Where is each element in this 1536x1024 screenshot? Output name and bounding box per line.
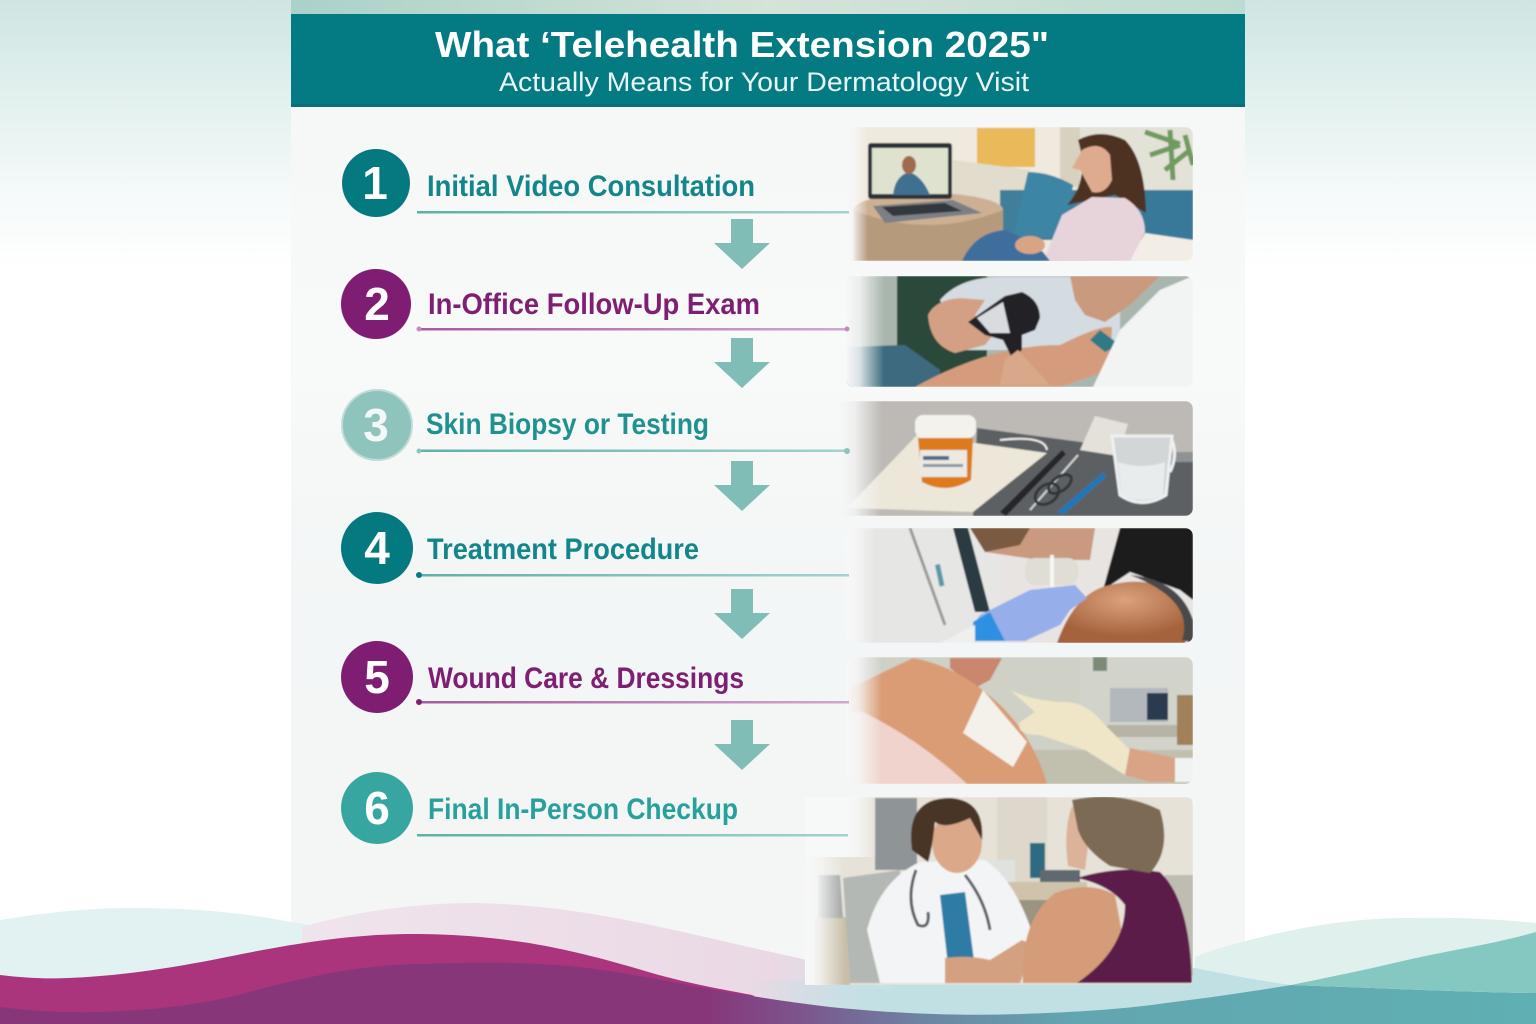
photo 2: dermatoscope exam	[846, 276, 1193, 387]
step 2	[341, 269, 850, 339]
step 3	[342, 390, 850, 460]
subtitle line: Actually Means for Your Dermatology Visit	[499, 67, 1030, 97]
rule 2	[416, 326, 850, 332]
label 5: Wound Care & Dressings	[428, 662, 744, 695]
number badge 1: 1	[362, 157, 388, 209]
step 5	[341, 641, 849, 713]
step 4	[341, 512, 849, 584]
number badge 2: 2	[364, 278, 390, 330]
number badge 2	[341, 269, 411, 339]
number badge 5	[341, 641, 413, 713]
rule 1	[417, 211, 849, 214]
bottom waves	[0, 903, 1536, 1024]
rule 4	[416, 572, 849, 578]
arrow 2	[714, 338, 770, 388]
step 1	[342, 149, 849, 217]
photo 3: biopsy tools	[840, 401, 1193, 516]
photo 6: in-person checkup	[805, 797, 1193, 985]
number badge 1	[342, 149, 410, 217]
step 6	[341, 772, 848, 844]
label 6: Final In-Person Checkup	[428, 793, 738, 826]
number badge 5: 5	[364, 651, 390, 703]
label 4: Treatment Procedure	[427, 533, 699, 566]
arrow 4	[714, 589, 770, 639]
title banner	[291, 0, 1245, 107]
number badge 3: 3	[363, 399, 389, 451]
number badge 6	[341, 772, 413, 844]
label 2: In-Office Follow-Up Exam	[428, 288, 760, 321]
number badge 3	[342, 390, 412, 460]
photo 1: video consultation	[846, 127, 1193, 262]
title line: What ‘Telehealth Extension 2025"	[435, 24, 1049, 65]
arrow 5	[714, 720, 770, 770]
number badge 4	[341, 512, 413, 584]
number badge 4: 4	[364, 522, 390, 574]
number badge 6: 6	[364, 782, 390, 834]
central panel	[291, 0, 1245, 1024]
photo 5: wound dressing	[846, 657, 1193, 784]
arrow 1	[714, 219, 770, 269]
rule 3	[416, 448, 850, 454]
arrow 3	[714, 461, 770, 511]
label 3: Skin Biopsy or Testing	[426, 408, 709, 441]
rule 5	[416, 699, 849, 705]
label 1: Initial Video Consultation	[427, 170, 755, 203]
photo 4: laser treatment	[845, 528, 1193, 643]
rule 6	[417, 834, 848, 836]
